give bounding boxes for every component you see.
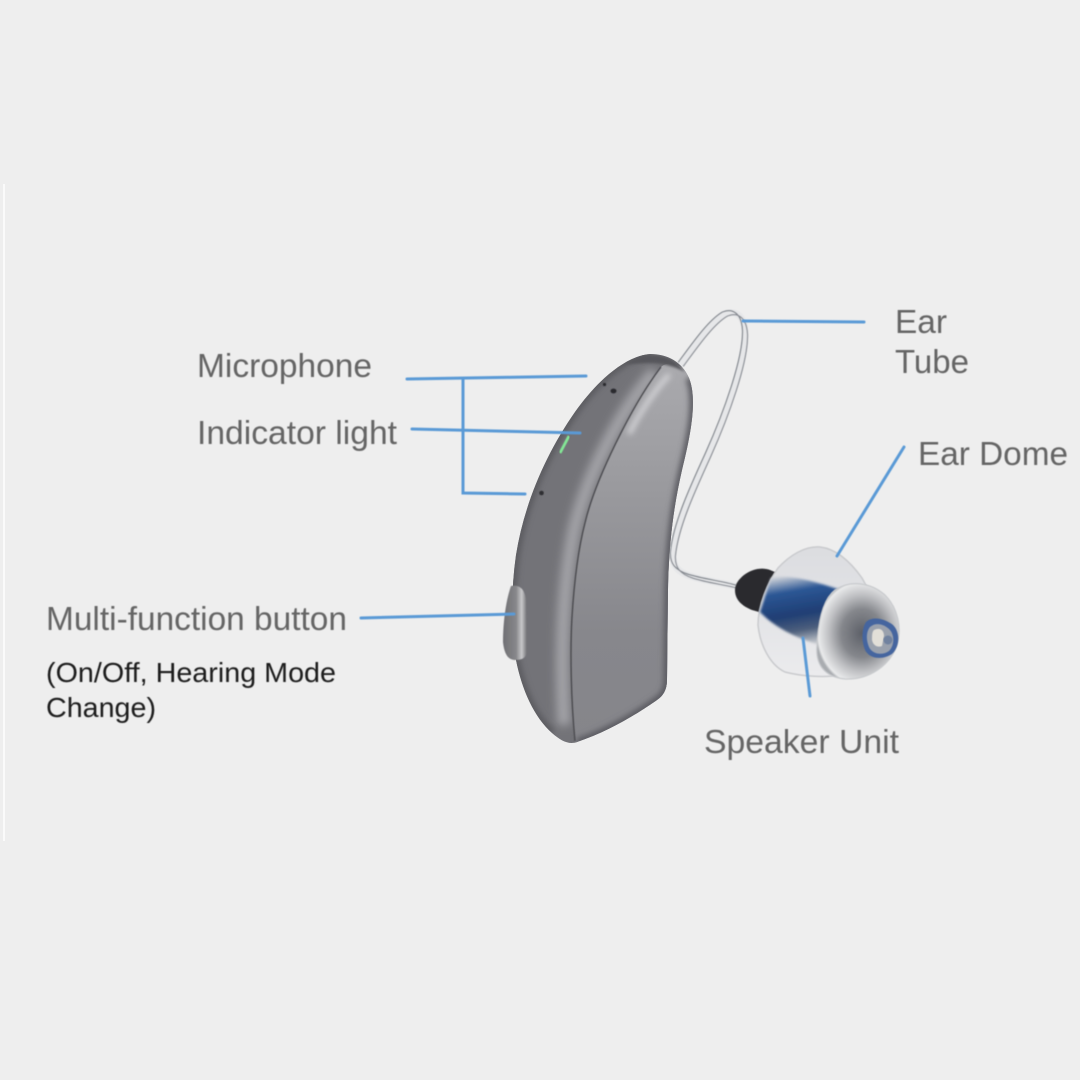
- small dome tip: [817, 584, 899, 679]
- highlight ridge beside seam: [562, 372, 655, 725]
- icon: ear tube: [670, 311, 748, 589]
- line: ear dome: [837, 447, 904, 556]
- white left edge strip: [3, 184, 5, 841]
- icon: ear dome and speaker: [735, 547, 899, 679]
- body front face: [571, 364, 695, 748]
- label: microphone: Microphone: [197, 347, 372, 384]
- body shell: [512, 354, 693, 743]
- multi-function button: [503, 586, 527, 660]
- line: multi-function button: [361, 614, 514, 618]
- seam line: [571, 367, 661, 741]
- line: ear tube: [743, 321, 864, 322]
- label: ear dome: Ear Dome: [918, 435, 1068, 472]
- infographic: hearing aid parts diagram: [3, 184, 1068, 841]
- label: button functions: (On/Off, Hearing Mode: [46, 657, 336, 688]
- top light reflection: [630, 376, 668, 432]
- label: button functions: Change): [46, 692, 156, 723]
- left edge shadow: [512, 354, 650, 733]
- speaker nozzle: [867, 624, 893, 654]
- label: ear tube: [895, 303, 969, 380]
- speaker connector: [735, 569, 782, 614]
- icon: hearing aid body: [503, 354, 695, 748]
- microphone holes: [603, 383, 616, 393]
- right edge shadow: [577, 378, 693, 742]
- label: ear tube: Tube: [895, 343, 969, 380]
- label: indicator light: Indicator light: [197, 414, 397, 451]
- speaker nozzle ring: [862, 618, 898, 658]
- speaker nozzle centre: [872, 629, 884, 647]
- line: indicator light: [412, 429, 580, 433]
- line: speaker unit: [803, 638, 810, 696]
- blue speaker band: [760, 577, 840, 646]
- label: ear tube: Ear: [895, 303, 947, 340]
- label: multi-function button: Multi-function button: [46, 600, 347, 637]
- leader lines: [361, 321, 904, 696]
- line: microphone: [407, 376, 586, 379]
- shaded body details: [512, 354, 695, 748]
- large dome: [758, 547, 885, 676]
- lower microphone hole: [539, 491, 544, 495]
- label: speaker unit: Speaker Unit: [704, 723, 899, 760]
- labels: [46, 303, 1068, 760]
- label: button functions: [46, 657, 336, 723]
- dark top cap: [625, 355, 685, 372]
- indicator light: [560, 436, 569, 453]
- line: microphone bracket: [463, 379, 525, 494]
